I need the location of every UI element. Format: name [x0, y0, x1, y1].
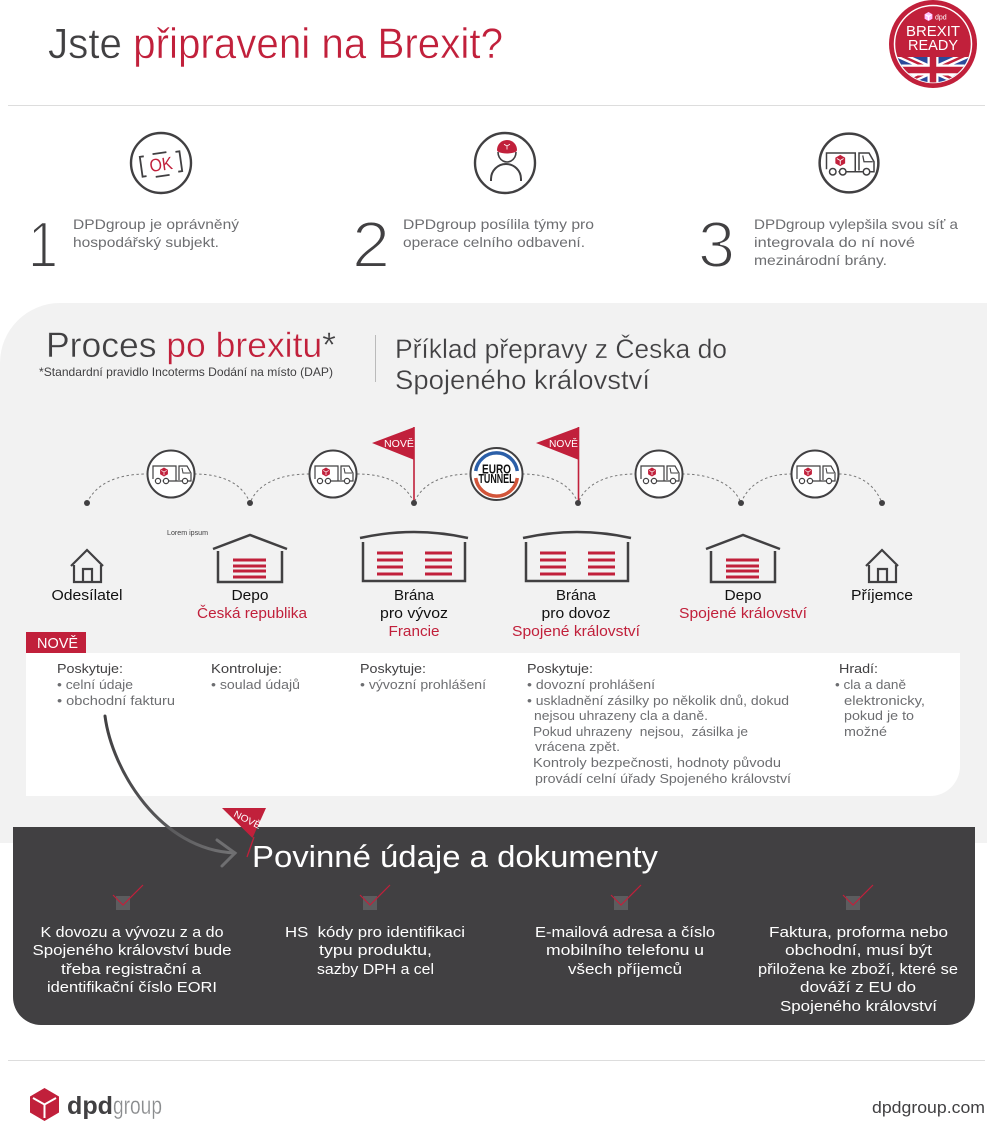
stop: depot UK [679, 535, 807, 622]
stop: export gate: pro vývoz [380, 606, 448, 622]
badge flag [898, 57, 968, 82]
column: recipient duties: elektronicky, [844, 693, 925, 708]
route timeline [84, 427, 885, 506]
column: import gate duties: • dovozní prohlášení [527, 677, 655, 692]
item: invoice: dováží z EU do [800, 979, 916, 996]
column: import gate duties [527, 661, 791, 786]
stop: import gate [512, 532, 640, 640]
logo: dpdgroup: group [113, 1092, 162, 1120]
item: HS codes: sazby DPH a cel [317, 961, 434, 978]
stop: depot CZ [197, 535, 308, 622]
badge: Brexit ready: READY [908, 37, 958, 54]
step 1: 1 [28, 208, 58, 281]
flag: export gate: NOVĚ [384, 437, 414, 450]
item: invoice: přiložena ke zboží, které se [758, 961, 958, 978]
tag: new [26, 632, 86, 653]
icon: check [113, 885, 143, 910]
flag: new documents [222, 808, 266, 857]
logo: dpdgroup [30, 1088, 162, 1121]
step 3: 3 [698, 208, 735, 281]
icon: check [843, 885, 873, 910]
icon: eurotunnel: TUNNEL [478, 472, 515, 486]
note: incoterms: *Standardní pravidlo Incoterms Dodání na místo (DAP) [39, 365, 333, 379]
item: EORI [32, 885, 232, 996]
website: dpdgroup.com [872, 1098, 985, 1117]
item: HS codes: HS kódy pro identifikaci [285, 924, 465, 941]
badge: Brexit ready [889, 0, 977, 90]
logo: dpdgroup: dpd [67, 1092, 113, 1120]
icon: OK stamp: OK [148, 153, 174, 176]
stop: export gate: Brána [394, 588, 435, 604]
column: sender duties: • celní údaje [57, 677, 133, 692]
step 3 [698, 134, 958, 281]
icon: truck 4 [792, 450, 838, 498]
icon: check [360, 885, 390, 910]
column: recipient duties: Hradí: [839, 661, 878, 676]
column: recipient duties: pokud je to [844, 708, 914, 723]
item: EORI: K dovozu a vývozu z a do [40, 924, 224, 941]
item: invoice: obchodní, musí být [785, 942, 933, 959]
icon: truck [820, 134, 878, 192]
column: depot duties: • soulad údajů [211, 677, 300, 692]
item: EORI: identifikační číslo EORI [47, 979, 217, 996]
item: contact: E-mailová adresa a číslo [535, 924, 715, 941]
flag: import gate: NOVĚ [549, 437, 578, 450]
item: EORI: třeba registrační a [61, 961, 202, 978]
item: EORI: Spojeného království bude [32, 942, 232, 959]
icon: OK stamp [131, 133, 191, 193]
column: export gate duties [360, 661, 486, 692]
column: depot duties: Kontroluje: [211, 661, 282, 676]
flag: new documents: NOVĚ [232, 809, 262, 832]
icon: eurotunnel: EURO [482, 462, 511, 476]
icon: person with cap [475, 133, 535, 193]
panel: responsibilities [26, 653, 960, 796]
item: HS codes: typu produktu, [319, 942, 432, 959]
column: export gate duties: • vývozní prohlášení [360, 677, 486, 692]
route stops [84, 500, 885, 506]
title: Jste připraveni na Brexit? [48, 20, 503, 68]
column: import gate duties: provádí celní úřady Spojeného království [535, 771, 791, 786]
badge: Brexit ready: BREXIT [906, 23, 960, 40]
step 2: 2 [352, 208, 390, 281]
flag: import gate [536, 427, 579, 503]
heading: documents: Povinné údaje a dokumenty [252, 839, 659, 874]
item: HS codes [285, 885, 465, 978]
step 1: hospodářský subjekt. [73, 234, 219, 250]
column: recipient duties: • cla a daně [835, 677, 906, 692]
item: contact: všech příjemců [568, 961, 682, 978]
icon: check [611, 885, 641, 910]
item: invoice: Spojeného království [780, 998, 938, 1015]
column: sender duties: • obchodní fakturu [57, 693, 175, 708]
stop: export gate [360, 532, 468, 640]
step 3: integrovala do ní nové [754, 234, 915, 250]
tag: new: NOVĚ [37, 635, 78, 652]
column: import gate duties: Poskytuje: [527, 661, 593, 676]
column: recipient duties: možné [844, 724, 887, 739]
stop: depot UK: Depo [724, 588, 762, 604]
stop: import gate: Brána [556, 588, 597, 604]
column: import gate duties: nejsou uhrazeny cla a daně. [534, 708, 708, 723]
step 2: DPDgroup posílila týmy pro [403, 216, 594, 232]
stop: recipient: Příjemce [851, 588, 913, 604]
badge logo: dpd [935, 14, 947, 22]
note: lorem ipsum: Lorem ipsum [167, 530, 208, 537]
column: import gate duties: • uskladnění zásilky po několik dnů, dokud [527, 693, 789, 708]
heading: process: Proces po brexitu* [46, 326, 336, 365]
flag: export gate [372, 427, 415, 503]
stop: import gate: pro dovoz [542, 606, 610, 622]
step 2 [352, 133, 594, 281]
step 3: DPDgroup vylepšila svou síť a [754, 216, 958, 232]
stop: depot CZ: Česká republika [197, 605, 308, 622]
arrow: to documents [105, 716, 235, 866]
panel: required documents [13, 827, 975, 1025]
panel: process background [0, 303, 987, 843]
stop: sender: Odesílatel [52, 588, 122, 604]
icon: truck 2 [310, 450, 356, 498]
stop: export gate: Francie [388, 624, 440, 640]
stop: depot UK: Spojené království [679, 606, 807, 622]
column: import gate duties: Kontroly bezpečnosti, hodnoty původu [533, 755, 781, 770]
stop: import gate: Spojené království [512, 624, 640, 640]
stop: sender [52, 550, 122, 604]
heading: example [395, 333, 727, 395]
step 3: mezinárodní brány. [754, 252, 887, 268]
step 1: DPDgroup je oprávněný [73, 216, 239, 232]
step 2: operace celního odbavení. [403, 234, 585, 250]
column: sender duties: Poskytuje: [57, 661, 123, 676]
step 1 [28, 133, 239, 281]
item: invoice [758, 885, 958, 1015]
item: invoice: Faktura, proforma nebo [769, 924, 948, 941]
column: import gate duties: vrácena zpět. [535, 739, 620, 754]
column: depot duties [211, 661, 300, 692]
column: recipient duties [835, 661, 925, 739]
column: sender duties [57, 661, 175, 708]
heading: example: Spojeného království [395, 365, 650, 395]
column: import gate duties: Pokud uhrazeny nejsou, zásilka je [533, 724, 748, 739]
icon: truck 3 [636, 450, 682, 498]
item: contact: mobilního telefonu u [546, 942, 704, 959]
icon: truck 1 [148, 450, 194, 498]
stop: recipient [851, 550, 913, 604]
item: contact [535, 885, 715, 978]
column: export gate duties: Poskytuje: [360, 661, 426, 676]
heading: example: Příklad přepravy z Česka do [395, 333, 727, 364]
icon: eurotunnel [470, 448, 522, 500]
stop: depot CZ: Depo [232, 588, 268, 604]
logo cube [30, 1088, 59, 1121]
